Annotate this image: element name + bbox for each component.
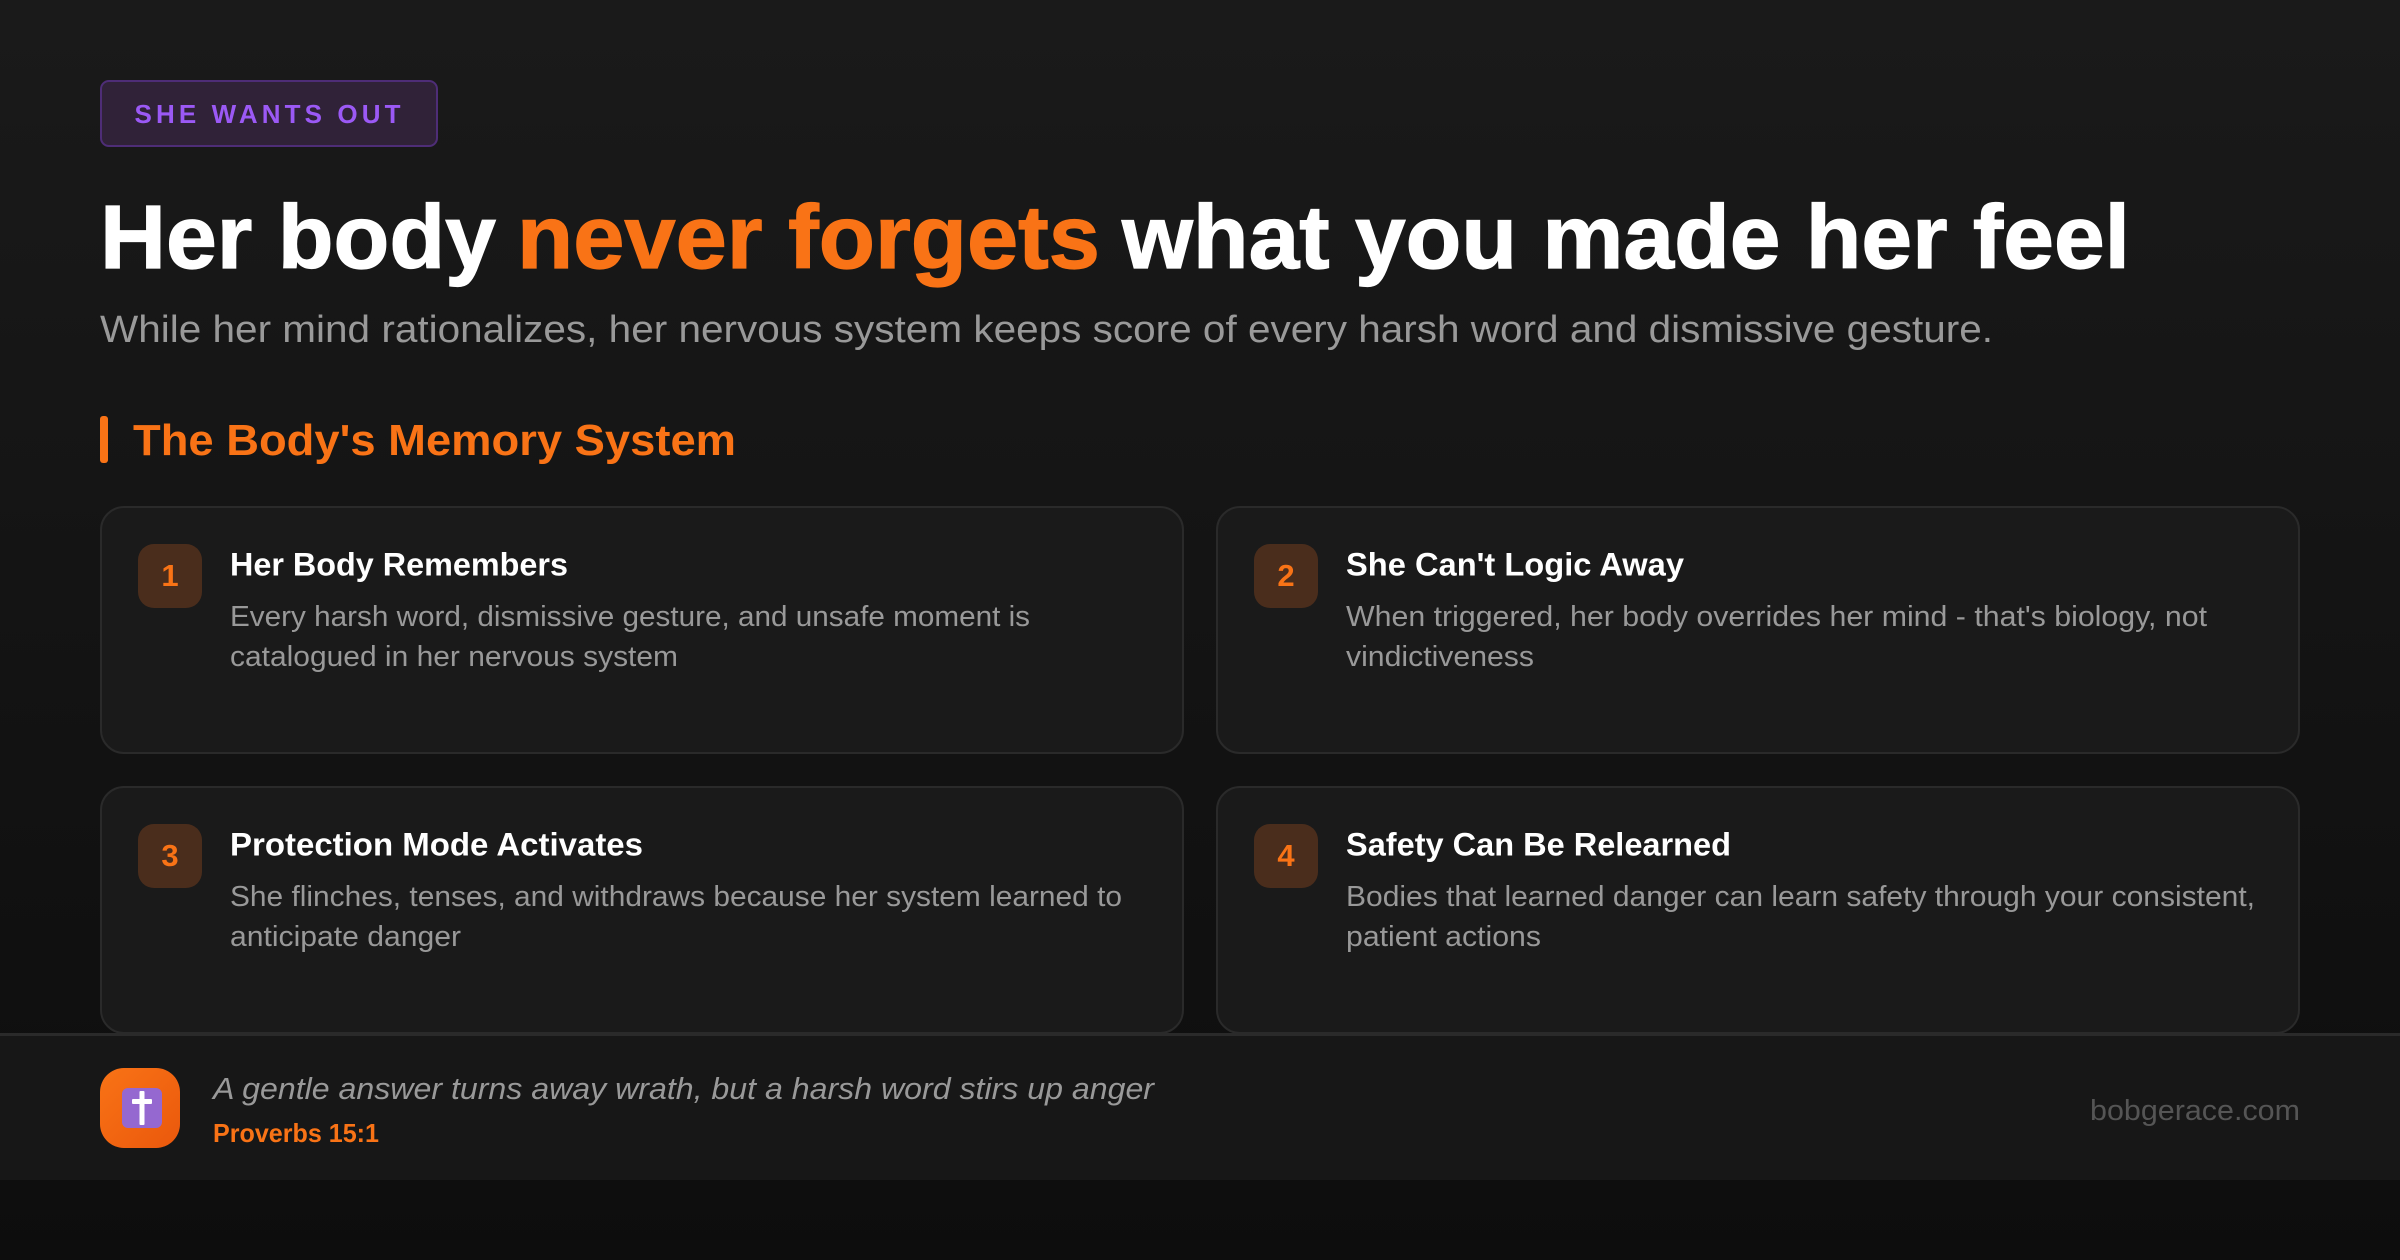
title: Her body bbox=[100, 188, 496, 288]
card 3: protection mode activates bbox=[101, 787, 1183, 1033]
card 4: safety can be relearned: Bodies that learned danger can learn safety through your consistent, bbox=[1346, 881, 2255, 913]
title: never forgets bbox=[517, 188, 1100, 288]
card 3: protection mode activates: She flinches, tenses, and withdraws because her system learned to bbox=[230, 881, 1122, 913]
scripture reference: Proverbs 15:1 bbox=[213, 1118, 379, 1148]
icon: cross bbox=[100, 1068, 180, 1148]
title bbox=[100, 188, 2130, 288]
title: what you made her feel bbox=[1121, 188, 2130, 288]
card 1: her body remembers bbox=[101, 507, 1183, 753]
card 2: she can't logic away bbox=[1217, 507, 2299, 753]
card 4: safety can be relearned: 4 bbox=[1277, 838, 1295, 873]
badge: she wants out bbox=[101, 81, 437, 146]
card 1: her body remembers: catalogued in her nervous system bbox=[230, 641, 678, 673]
card 1: her body remembers: Every harsh word, dismissive gesture, and unsafe moment is bbox=[230, 601, 1030, 633]
card 4: safety can be relearned: patient actions bbox=[1346, 921, 1541, 953]
card 4: safety can be relearned: Safety Can Be Relearned bbox=[1346, 826, 1731, 862]
card 1: her body remembers: Her Body Remembers bbox=[230, 546, 568, 582]
card 2: she can't logic away: vindictiveness bbox=[1346, 641, 1534, 673]
card 2: she can't logic away: When triggered, her body overrides her mind - that's biology, not bbox=[1346, 601, 2207, 633]
scripture quote: A gentle answer turns away wrath, but a harsh word stirs up anger bbox=[211, 1071, 1156, 1106]
card 1: her body remembers: 1 bbox=[161, 558, 179, 593]
subtitle: While her mind rationalizes, her nervous system keeps score of every harsh word and dismissive gesture. bbox=[100, 309, 1993, 351]
card 2: she can't logic away: She Can't Logic Away bbox=[1346, 546, 1684, 582]
card 2: she can't logic away: 2 bbox=[1277, 558, 1295, 593]
badge: she wants out: SHE WANTS OUT bbox=[134, 99, 401, 129]
website: bobgerace.com bbox=[2090, 1095, 2300, 1127]
section heading: the body's memory system: The Body's Memory System bbox=[133, 416, 736, 465]
card 3: protection mode activates: Protection Mode Activates bbox=[230, 826, 643, 862]
card 4: safety can be relearned bbox=[1217, 787, 2299, 1033]
card 3: protection mode activates: 3 bbox=[161, 838, 179, 873]
footer bar bbox=[0, 1033, 2400, 1180]
card 3: protection mode activates: anticipate danger bbox=[230, 921, 462, 953]
